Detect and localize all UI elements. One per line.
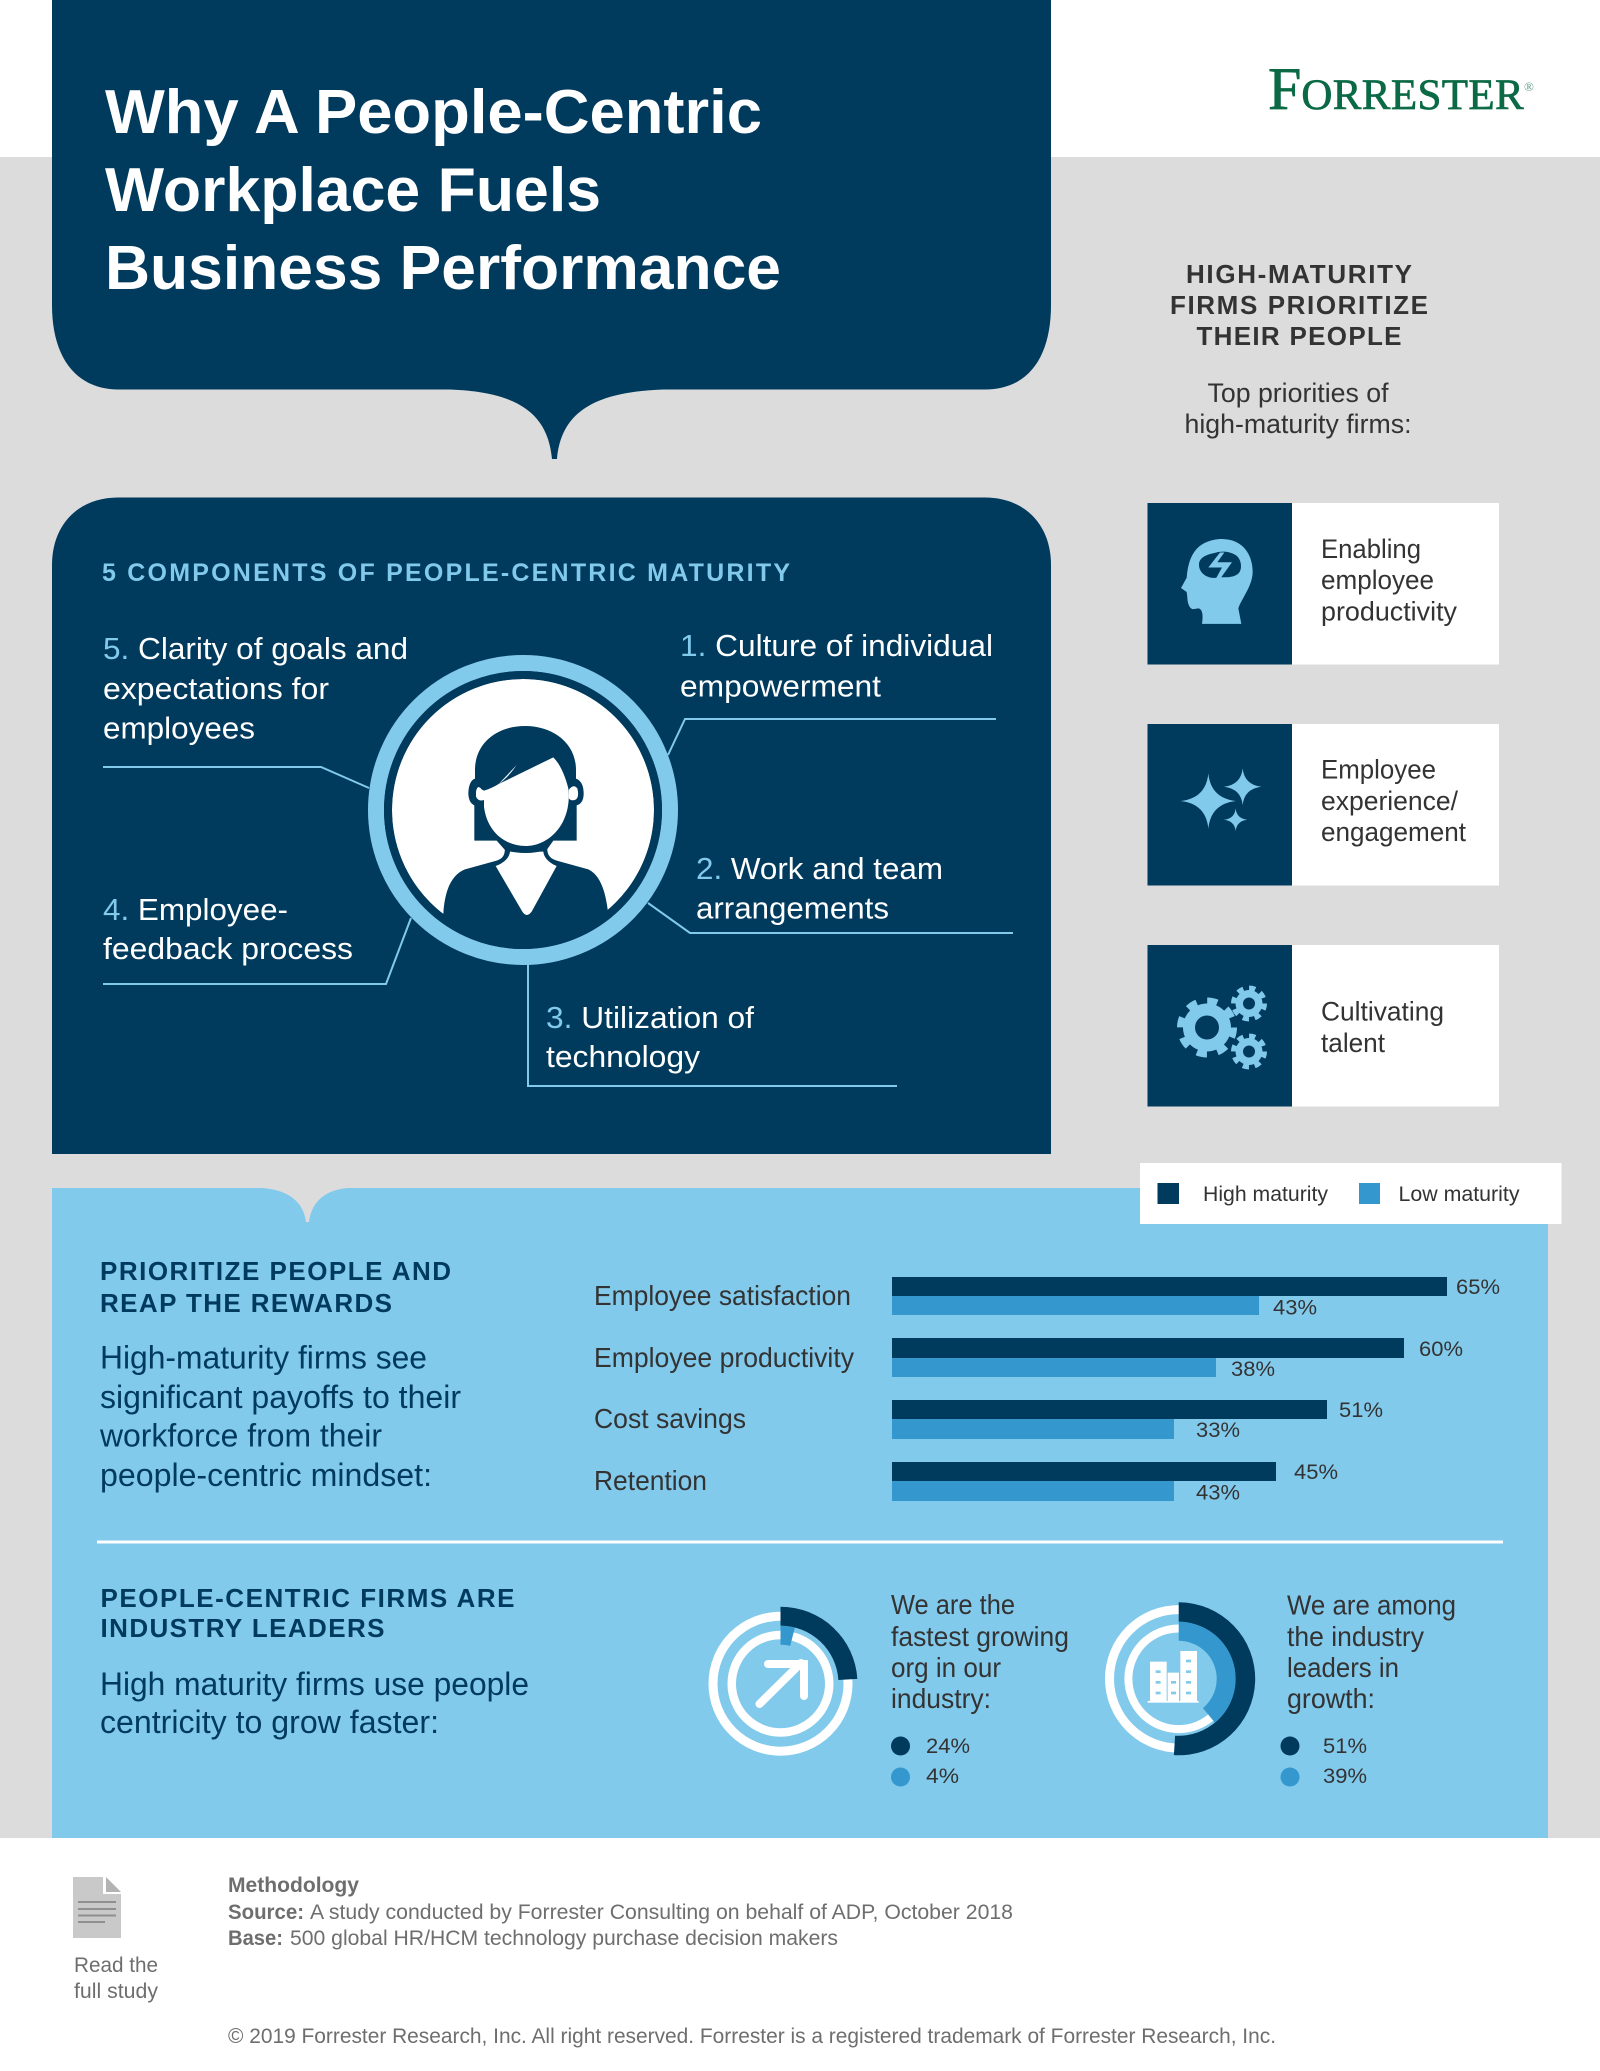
notch — [262, 1188, 348, 1222]
heading: industry leaders: INDUSTRY LEADERS — [100, 1613, 384, 1643]
card: employee experience — [1148, 724, 1499, 886]
item 5: employees — [103, 710, 255, 746]
text: fastest growing: We are the — [891, 1589, 1015, 1620]
heading: high-maturity firms — [1170, 259, 1428, 351]
text: fastest growing — [891, 1589, 1069, 1714]
donut chart: industry leaders — [1110, 1602, 1255, 1755]
bar chart: 60% — [1419, 1337, 1463, 1361]
bar chart: Employee satisfaction — [594, 1280, 851, 1311]
heading: high-maturity firms: THEIR PEOPLE — [1196, 321, 1402, 351]
legend: industry leaders values: 51% — [1323, 1734, 1367, 1758]
item 5 — [103, 631, 408, 746]
icon: sparkles — [1181, 768, 1261, 831]
text: grow faster — [100, 1666, 529, 1740]
text: methodology: 500 global HR/HCM technology purchase decision makers — [290, 1926, 838, 1950]
text: read the full study: Read the — [74, 1953, 158, 1977]
heading: prioritize people — [100, 1256, 451, 1318]
bar chart: 43% — [1196, 1480, 1240, 1504]
card: cultivating talent: Cultivating — [1321, 996, 1444, 1026]
item 5: expectations for — [103, 671, 329, 706]
text: payoffs: workforce from their — [99, 1418, 382, 1454]
text: grow faster: High maturity firms use people — [100, 1666, 529, 1702]
title: Why A People-Centric — [105, 78, 762, 147]
icon: buildings — [1148, 1651, 1199, 1703]
legend: fastest growing values: 4% — [926, 1764, 959, 1788]
heading: 5 components: 5 COMPONENTS OF PEOPLE-CENTRIC MATURITY — [102, 559, 790, 587]
title: Workplace Fuels — [105, 156, 601, 225]
heading: prioritize people: PRIORITIZE PEOPLE AND — [100, 1256, 451, 1286]
card: employee experience: engagement — [1321, 817, 1466, 847]
text: methodology — [228, 1873, 1013, 1950]
text: fastest growing: fastest growing — [891, 1621, 1069, 1652]
text: grow faster: centricity to grow faster: — [100, 1704, 439, 1740]
item 2: arrangements — [696, 890, 889, 926]
icon: person in circle — [376, 663, 670, 957]
text: payoffs: significant payoffs to their — [100, 1379, 461, 1415]
card: cultivating talent: talent — [1321, 1028, 1385, 1058]
text: industry leaders in growth: growth: — [1287, 1683, 1375, 1714]
text: payoffs: High-maturity firms see — [100, 1340, 427, 1376]
text: methodology: A study conducted by Forrester Consulting on behalf of ADP, October 2018 — [310, 1900, 1013, 1924]
title — [105, 78, 781, 303]
logo: Forrester: FORRESTER — [1268, 56, 1524, 122]
item 2 — [696, 851, 943, 926]
icon: document — [73, 1877, 121, 1938]
icon: gears — [1181, 988, 1264, 1067]
item 3 — [546, 1000, 754, 1074]
item 4 — [103, 892, 353, 966]
panel: 5 components — [52, 498, 1051, 1154]
legend: industry leaders values: 39% — [1323, 1764, 1367, 1788]
card: cultivating talent — [1148, 945, 1499, 1106]
bar chart: 43% — [1273, 1296, 1317, 1320]
text: read the full study — [74, 1953, 158, 2003]
item 4: 4. Employee- — [103, 892, 288, 927]
bar chart: 33% — [1196, 1418, 1240, 1442]
card: enabling employee productivity: employee — [1321, 565, 1434, 595]
icon: arrow — [760, 1663, 804, 1704]
item 4: feedback process — [103, 931, 353, 966]
title panel — [52, 0, 1051, 459]
bar chart: 38% — [1231, 1357, 1275, 1381]
text: methodology: Base: — [228, 1926, 283, 1950]
text: payoffs — [99, 1340, 461, 1493]
item 1 — [680, 628, 993, 704]
bar chart: Retention — [594, 1465, 707, 1496]
bar chart: 51% — [1339, 1398, 1383, 1422]
heading: industry leaders — [100, 1583, 514, 1643]
card: enabling employee productivity — [1148, 503, 1499, 664]
text: read the full study: full study — [74, 1979, 158, 2003]
card: employee experience: Employee — [1321, 754, 1436, 784]
heading: prioritize people: REAP THE REWARDS — [100, 1288, 392, 1318]
item 5: 5. Clarity of goals and — [103, 631, 408, 666]
text: methodology: Source: — [228, 1900, 304, 1924]
heading: industry leaders: PEOPLE-CENTRIC FIRMS ARE — [100, 1583, 514, 1613]
text: top priorities: high-maturity firms: — [1184, 409, 1412, 439]
card: enabling employee productivity: Enabling — [1321, 534, 1421, 564]
text: industry leaders in growth: We are among — [1287, 1590, 1456, 1620]
heading: high-maturity firms: HIGH-MATURITY — [1186, 259, 1412, 289]
logo: Forrester: ® — [1524, 79, 1534, 94]
item 3: 3. Utilization of — [546, 1000, 754, 1035]
text: payoffs: people-centric mindset: — [100, 1457, 432, 1493]
heading: high-maturity firms: FIRMS PRIORITIZE — [1170, 290, 1428, 320]
legend: industry leaders values — [1280, 1734, 1367, 1788]
title: Business Performance — [105, 234, 781, 303]
bar chart — [594, 1275, 1500, 1504]
bar chart: Employee productivity — [594, 1342, 854, 1373]
text: fastest growing: industry: — [891, 1683, 991, 1714]
legend: fastest growing values — [891, 1734, 970, 1788]
icon: head with lightning bolt — [1181, 539, 1253, 624]
text: copyright: © 2019 Forrester Research, Inc. All right reserved. Forrester is a registered trademark of Forrester Research, Inc. — [228, 2024, 1276, 2048]
bar chart: Cost savings — [594, 1403, 746, 1434]
text: top priorities: Top priorities of — [1208, 378, 1389, 408]
legend: high and low maturity: Low maturity — [1398, 1182, 1520, 1206]
text: industry leaders in growth — [1287, 1590, 1456, 1714]
panel: prioritize people section — [52, 1188, 1548, 1838]
item 1: empowerment — [680, 668, 881, 704]
bar chart: 65% — [1456, 1275, 1500, 1299]
text: methodology: Methodology — [228, 1873, 359, 1897]
legend: high and low maturity — [1140, 1163, 1562, 1224]
card: employee experience: experience/ — [1321, 786, 1458, 816]
item 3: technology — [546, 1039, 701, 1074]
card: enabling employee productivity: productivity — [1321, 596, 1457, 626]
connector lines — [103, 719, 1013, 1086]
text: industry leaders in growth: leaders in — [1287, 1652, 1399, 1683]
item 1: 1. Culture of individual — [680, 628, 993, 663]
text: industry leaders in growth: the industry — [1287, 1621, 1424, 1652]
text: fastest growing: org in our — [891, 1652, 1001, 1683]
bar chart: 45% — [1294, 1460, 1338, 1484]
legend: high and low maturity: High maturity — [1203, 1182, 1328, 1206]
donut chart: fastest growing — [713, 1607, 857, 1751]
item 2: 2. Work and team — [696, 851, 943, 886]
text: top priorities — [1184, 378, 1412, 439]
legend: fastest growing values: 24% — [926, 1734, 970, 1758]
